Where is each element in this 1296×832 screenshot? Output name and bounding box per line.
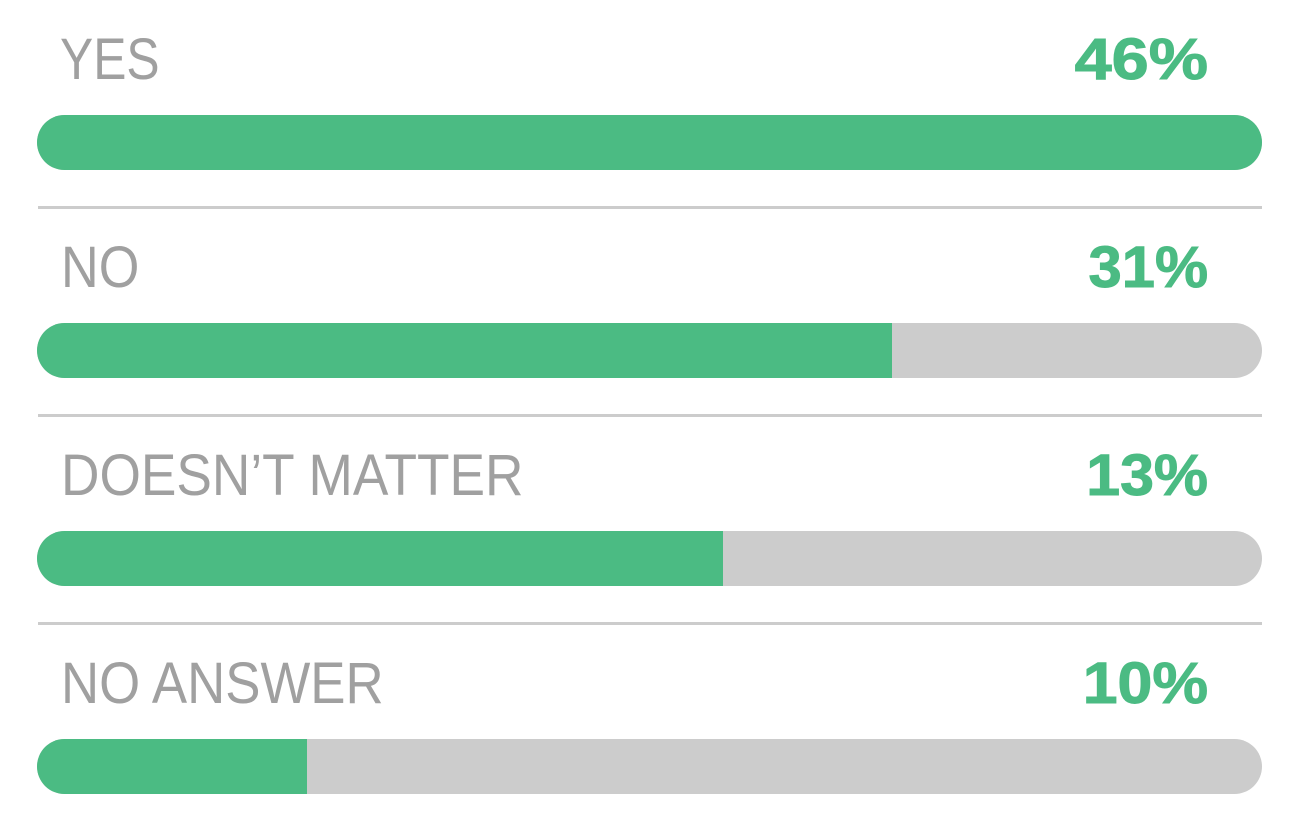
bar: no answer xyxy=(37,739,1262,794)
bar: yes xyxy=(37,115,1262,170)
label: doesn't matter: DOESN’T MATTER xyxy=(61,443,523,508)
row: no xyxy=(37,235,1262,378)
label: no answer: NO ANSWER xyxy=(61,651,384,716)
value: 31%: 31% xyxy=(1088,235,1208,300)
row: no answer xyxy=(37,651,1262,794)
value: 13%: 13% xyxy=(1086,443,1208,508)
value: 10%: 10% xyxy=(1083,651,1208,716)
label: yes: YES xyxy=(60,27,160,92)
value: 46%: 46% xyxy=(1074,27,1208,92)
bar: no xyxy=(37,323,1262,378)
label: no: NO xyxy=(61,235,139,300)
bar: doesn't matter xyxy=(37,531,1262,586)
row: yes xyxy=(37,27,1262,170)
row: doesn't matter xyxy=(37,443,1262,586)
